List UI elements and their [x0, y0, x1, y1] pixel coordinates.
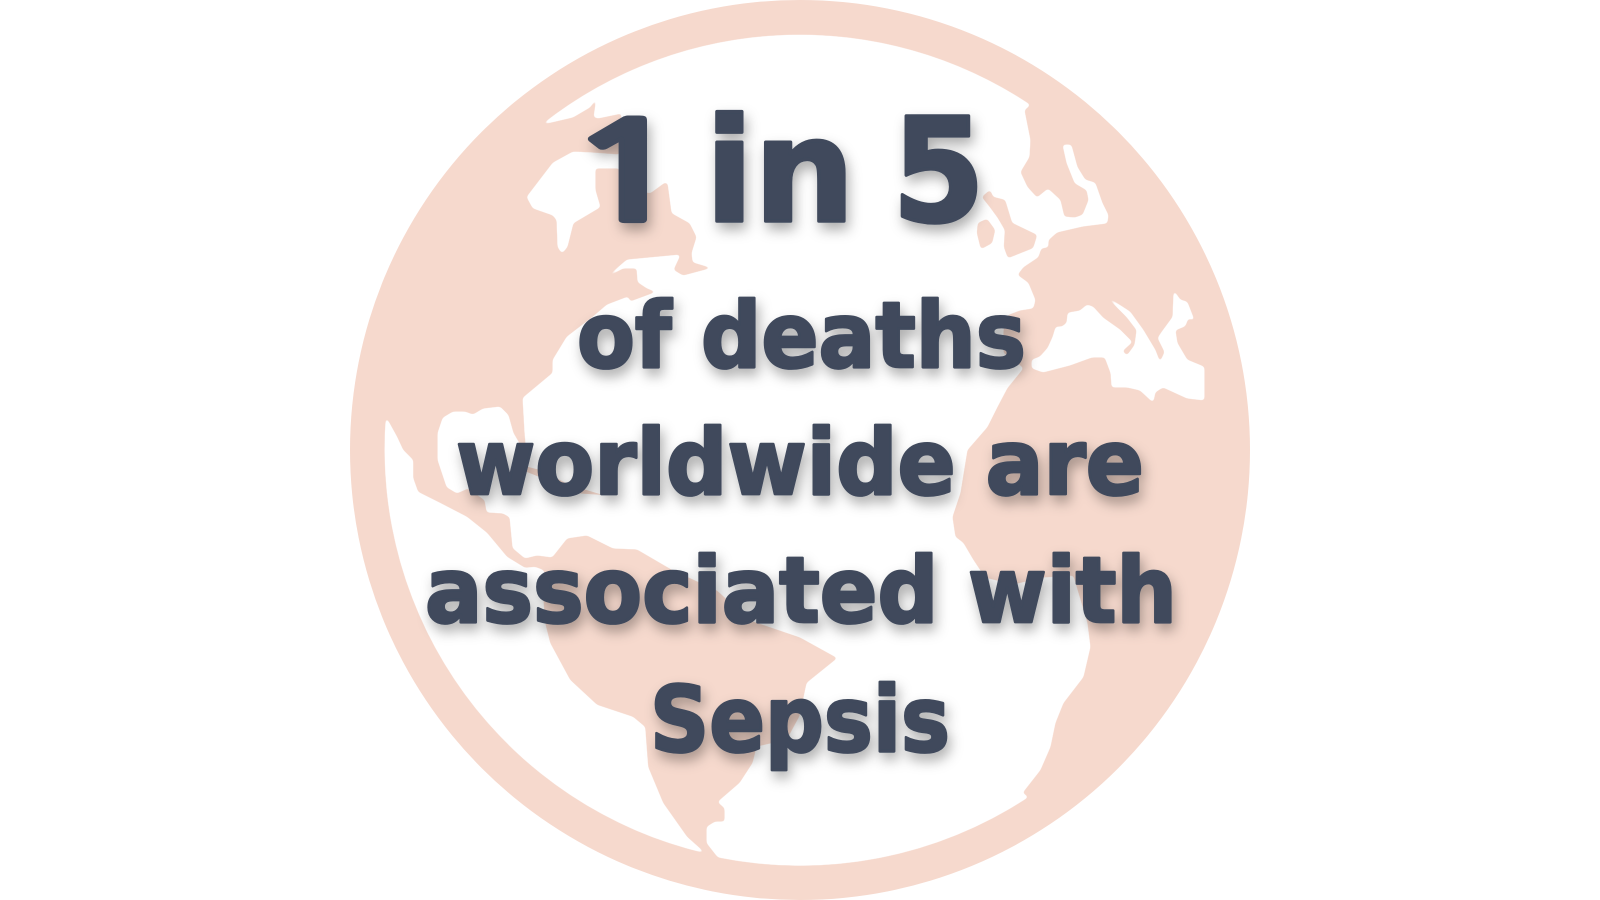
- ocean: pacific: [385, 417, 705, 853]
- land: ireland: [977, 219, 995, 249]
- statistic headline: [425, 87, 1177, 773]
- headline: 1 in 5: 1: [563, 107, 693, 242]
- headline: 1 in 5: 5: [892, 87, 985, 255]
- headline: 1 in 5: [563, 87, 985, 255]
- line: Sepsis: Sepsis: [650, 668, 950, 773]
- headline: 1 in 5: in: [705, 87, 855, 255]
- line: of deaths: of deaths: [577, 284, 1026, 389]
- ocean: mediterranean and black sea: [1032, 291, 1204, 402]
- land: great britain: [982, 190, 1037, 258]
- ocean: atlantic: [438, 35, 1108, 865]
- land: caribbean island: [513, 463, 603, 495]
- globe icon: [350, 0, 1250, 900]
- line: worldwide are: worldwide are: [456, 411, 1144, 516]
- globe disc and land colour: [350, 0, 1250, 900]
- line: associated with: associated with: [425, 539, 1177, 644]
